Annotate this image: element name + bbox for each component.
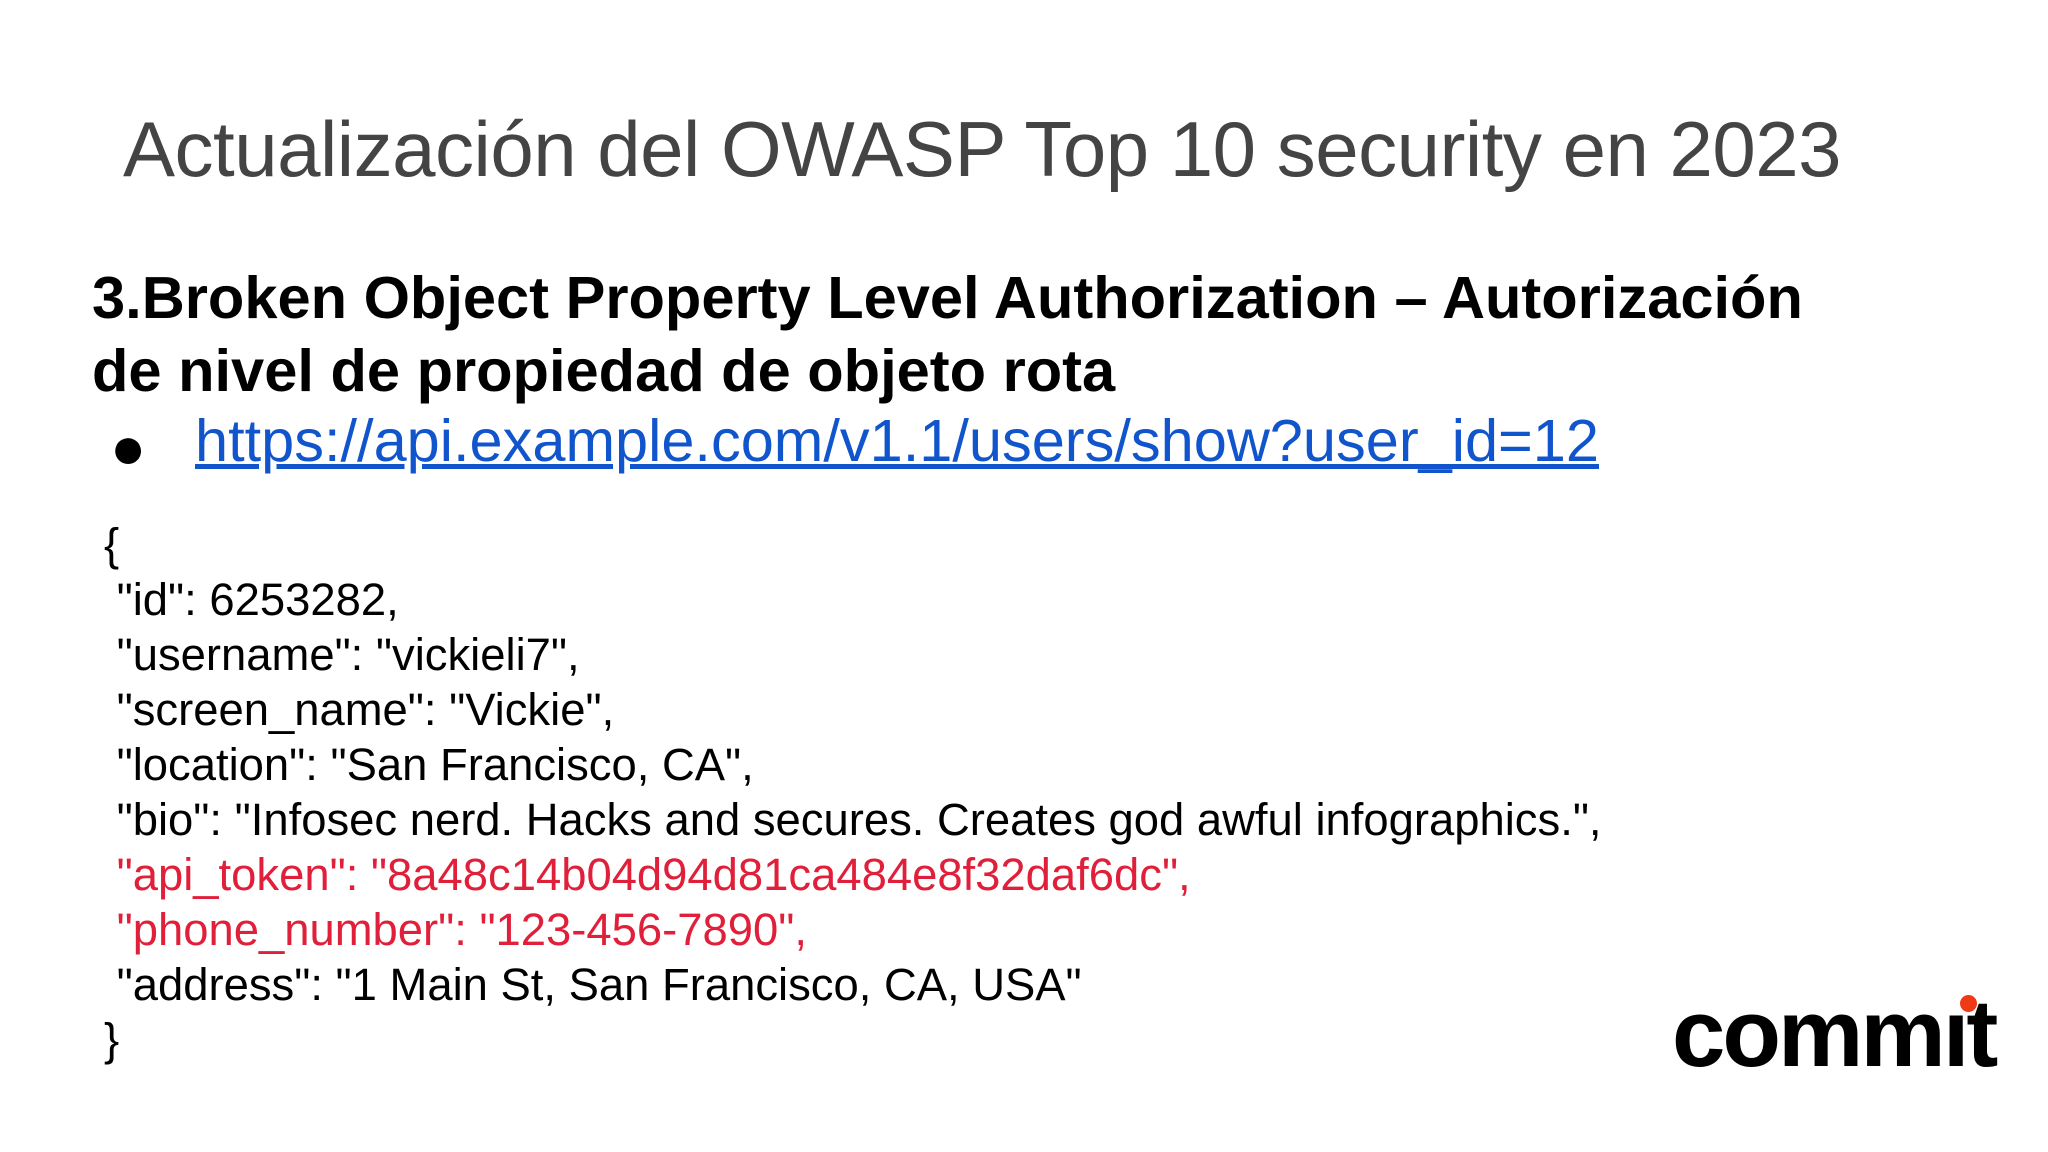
code block: json response: "screen_name": "Vickie",: [117, 684, 614, 735]
code block: json response: }: [104, 1014, 119, 1065]
code block: json response: {: [104, 519, 119, 570]
code block: json response: "bio": "Infosec nerd. Hacks and secures. Creates god awful infographics.",: [117, 794, 1602, 845]
code block: json response: "id": 6253282,: [117, 574, 399, 625]
code block: json response: [104, 519, 1602, 1065]
heading: [92, 264, 1803, 404]
url link: https://api.example.com/v1.1/users/show?user_id=12: [195, 407, 1599, 474]
logo dot: [1960, 995, 1977, 1012]
logo: commit: commıt: [1672, 980, 1995, 1087]
heading: de nivel de propiedad de objeto rota: [92, 337, 1115, 404]
code block: json response: "api_token": "8a48c14b04d94d81ca484e8f32daf6dc",: [117, 849, 1191, 900]
code block: json response: "username": "vickieli7",: [117, 629, 580, 680]
code block: json response: "location": "San Francisco, CA",: [117, 739, 754, 790]
bullet: ●: [110, 414, 146, 481]
code block: json response: "address": "1 Main St, San Francisco, CA, USA": [117, 959, 1082, 1010]
title: Actualización del OWASP Top 10 security en 2023: [123, 105, 1841, 193]
code block: json response: "phone_number": "123-456-7890",: [117, 904, 807, 955]
heading: 3.Broken Object Property Level Authorization – Autorización: [92, 264, 1803, 331]
